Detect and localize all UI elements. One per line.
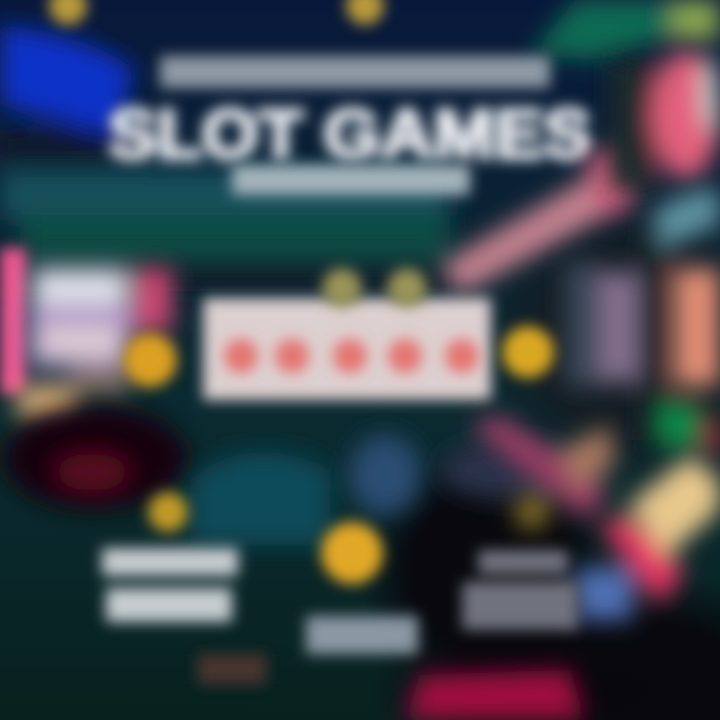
right slot machines	[565, 188, 720, 456]
left pink column	[0, 248, 26, 394]
header background	[0, 0, 720, 291]
pink diagonal banner	[440, 145, 635, 295]
bottom red shape	[405, 670, 585, 720]
faint label	[198, 654, 266, 684]
title subtitle line	[232, 165, 470, 195]
text block: left	[102, 548, 238, 622]
title	[108, 56, 592, 173]
dark red blob	[3, 406, 187, 510]
lower dark shapes	[3, 406, 580, 545]
reel symbols	[224, 339, 479, 373]
icon: left coin	[123, 333, 177, 387]
icon: centre coin	[321, 522, 383, 584]
central slot reels panel	[203, 298, 491, 400]
text block: right	[462, 550, 578, 630]
right top pink wheel	[610, 51, 720, 190]
title top line	[160, 56, 550, 88]
left slot machine	[18, 268, 172, 423]
icon: panel top coins	[322, 268, 427, 308]
title main line: SLOT GAMES	[108, 95, 592, 173]
icon: top coins	[49, 0, 384, 25]
blue blob	[349, 435, 421, 515]
text block: centre	[306, 616, 418, 654]
purple haze	[440, 440, 580, 500]
teal blob	[190, 452, 330, 545]
icon: lower left coin	[148, 492, 188, 532]
icon: right coin	[502, 326, 554, 378]
right diagonal slot stripes	[470, 415, 720, 620]
lower right dark background	[360, 195, 720, 720]
